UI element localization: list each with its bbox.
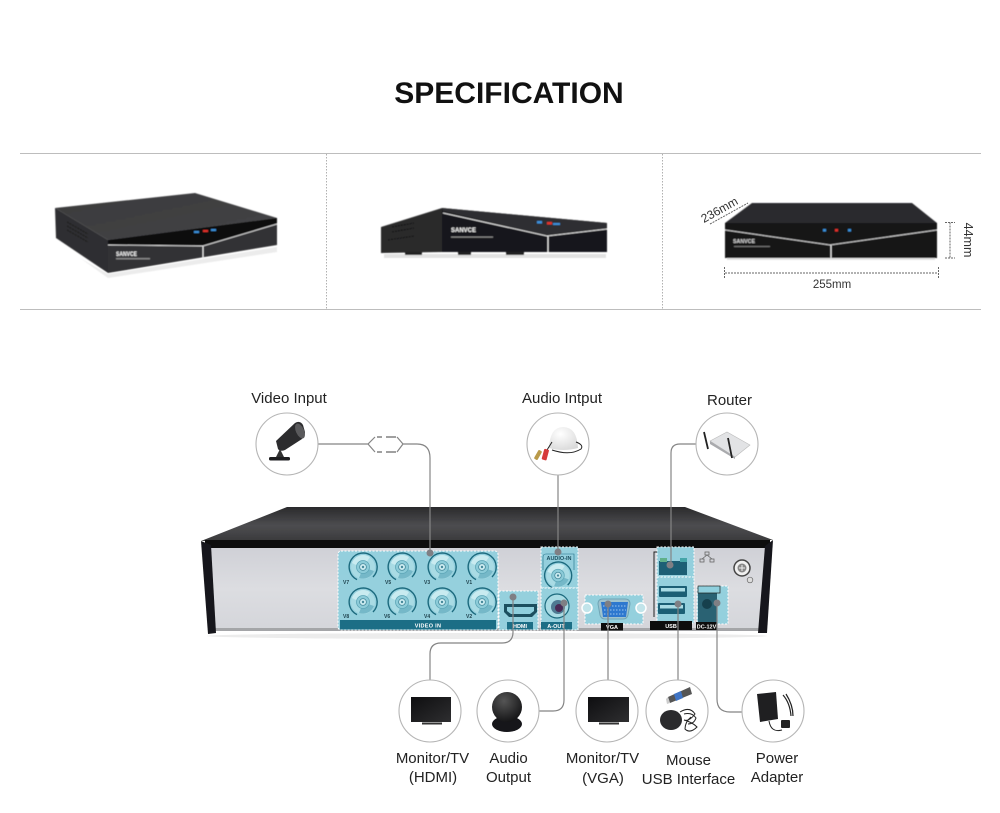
ports: video in: V2 <box>466 614 472 620</box>
icon: ground screw <box>734 560 753 583</box>
device: monitor vga: Monitor/TV <box>566 750 639 767</box>
ports: hdmi <box>499 591 538 630</box>
ports: vga: VGA <box>606 625 618 631</box>
ports: dc power <box>696 586 728 630</box>
ports: audio in: AUDIO-IN <box>546 556 572 562</box>
dimension: width 255mm <box>724 267 938 291</box>
device: monitor hdmi: (HDMI) <box>409 769 457 786</box>
device: power adapter <box>742 680 804 786</box>
dimension: height 44mm: 44mm <box>961 223 975 257</box>
ports: network and usb <box>650 547 694 630</box>
device: video input camera <box>251 390 328 475</box>
recorder: side view <box>381 208 607 258</box>
device: speaker <box>477 680 539 786</box>
connection lines <box>318 437 742 712</box>
device: mouse and usb <box>642 680 735 788</box>
ports: video in: V4 <box>424 614 430 620</box>
ports: video in: V1 <box>466 580 472 586</box>
device: mouse and usb: USB Interface <box>642 771 735 788</box>
recorder: side view: SANVCE <box>451 227 477 234</box>
device: router <box>696 392 758 475</box>
device: monitor hdmi: Monitor/TV <box>396 750 469 767</box>
device: audio input microphone: Audio Intput <box>522 390 603 407</box>
ports: video in: V6 <box>384 614 390 620</box>
icon: network symbol <box>700 552 714 562</box>
ports: network and usb: USB <box>665 624 677 630</box>
device: mouse and usb: Mouse <box>666 752 711 769</box>
dimension: depth 236mm: 236mm <box>699 194 740 226</box>
dimension: height 44mm <box>945 222 975 258</box>
device: speaker: Audio <box>489 750 528 767</box>
ports: video in: V8 <box>343 614 349 620</box>
device: power adapter: Power <box>756 750 798 767</box>
device: power adapter: Adapter <box>751 769 803 786</box>
recorder: angled view: SANVCE <box>116 252 137 258</box>
top cover <box>201 507 773 541</box>
device: monitor vga: (VGA) <box>582 770 624 787</box>
title: SPECIFICATION <box>394 77 624 110</box>
back panel <box>210 546 765 631</box>
recorder: angled view <box>55 193 277 278</box>
recorder: front view with dimensions <box>699 194 975 291</box>
ports: audio in <box>541 547 578 588</box>
connection diagram: recorder rear <box>201 507 773 639</box>
dimension: width 255mm: 255mm <box>813 279 851 291</box>
ports: video in: V3 <box>424 580 430 586</box>
ports: video in <box>338 551 498 630</box>
ports: hdmi: HDMI <box>513 624 527 630</box>
ports: audio out: A-OUT <box>547 624 565 630</box>
device: router: Router <box>707 392 752 409</box>
ports: video in: VIDEO IN <box>415 624 441 630</box>
ports: video in: V7 <box>343 580 349 586</box>
device: speaker: Output <box>486 769 532 786</box>
ports: audio out <box>541 588 578 630</box>
device: video input camera: Video Input <box>251 390 328 407</box>
recorder body <box>725 203 937 260</box>
device: monitor hdmi <box>396 680 469 786</box>
ports: vga <box>582 595 646 631</box>
device: monitor vga <box>566 680 639 787</box>
recorder body: SANVCE <box>733 239 755 245</box>
panel: product views <box>20 154 981 310</box>
device: audio input microphone <box>522 390 603 475</box>
ports: dc power: DC-12V <box>697 624 717 630</box>
ports: video in: V5 <box>385 580 391 586</box>
